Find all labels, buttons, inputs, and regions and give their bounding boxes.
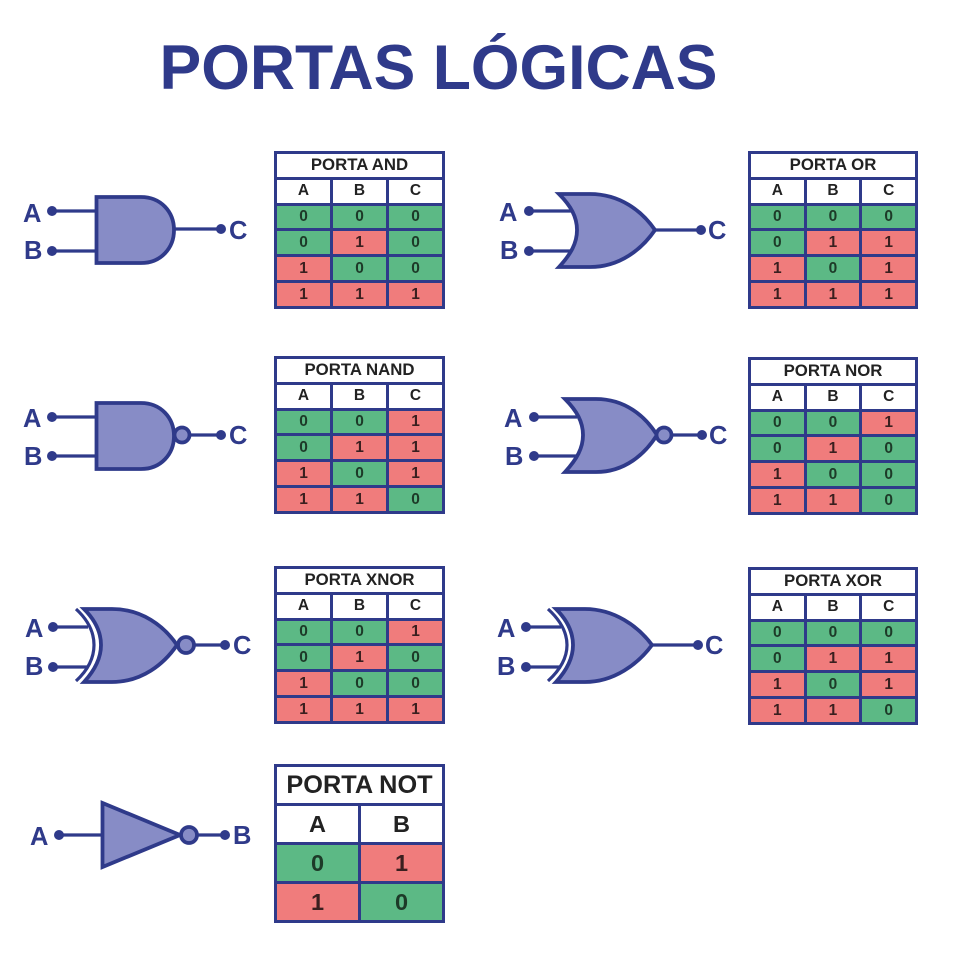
row 1 0 1: 1: [773, 260, 782, 277]
icon: AND gate: A: [23, 200, 41, 228]
icon: XNOR gate: C: [233, 632, 251, 660]
table heading: PORTA OR: [790, 155, 876, 174]
row 1 1 0: [277, 488, 442, 511]
row 1 1 1: [277, 283, 442, 306]
header row: C: [410, 387, 421, 404]
icon: NAND gate: B: [24, 443, 42, 471]
table heading: PORTA NOR: [784, 361, 882, 380]
row 1 1 0: 0: [884, 492, 893, 509]
row 0 0 0: 0: [773, 624, 782, 641]
table heading: PORTA NAND: [304, 360, 414, 379]
row 0 0 1: 0: [773, 414, 782, 431]
row 0 0 0: 0: [411, 208, 420, 225]
row 0 1: 1: [395, 850, 408, 876]
row 0 0 0: [751, 622, 915, 644]
row 1 0 1: 1: [411, 465, 420, 482]
row 0 1 1: [277, 436, 442, 459]
header row: A: [309, 810, 326, 836]
row 0 1 0: 1: [829, 440, 837, 457]
row 1 0 0: 1: [299, 675, 308, 692]
row 1 0 0: 1: [773, 466, 782, 483]
header row: [277, 806, 442, 842]
row 0 1 1: [751, 647, 915, 670]
row 1 0 0: 0: [411, 260, 420, 277]
row 0 0 1: 0: [299, 623, 308, 640]
row 1 1 1: 1: [884, 286, 893, 303]
icon: NOR gate: [504, 399, 727, 472]
header row: C: [410, 182, 421, 199]
row 1 0 0: [277, 257, 442, 280]
panel: NAND truth table: [274, 356, 445, 514]
row 0 0 0: [277, 206, 442, 228]
header row: [277, 385, 442, 408]
table heading: PORTA AND: [311, 155, 408, 174]
icon: OR gate: B: [500, 237, 518, 265]
icon: NOT gate: B: [233, 822, 251, 850]
row 0 0 1: 0: [355, 623, 364, 640]
row 1 0 1: 1: [884, 676, 893, 693]
row 0 1 1: 0: [773, 234, 782, 251]
row 1 0 1: [751, 673, 915, 696]
icon: NOR gate: C: [709, 422, 727, 450]
panel: OR truth table: [748, 151, 918, 309]
row 0 1 1: 1: [355, 439, 364, 456]
header row: A: [298, 387, 309, 404]
row 1 0 0: 0: [884, 466, 893, 483]
header row: A: [298, 182, 309, 199]
row 0 0 0: 0: [773, 208, 782, 225]
header row: B: [827, 598, 839, 615]
panel: NOT truth table: [274, 764, 445, 923]
row 0 1 0: [277, 646, 442, 669]
row 1 1 0: 1: [355, 491, 364, 508]
row 1 0 1: 0: [829, 260, 837, 277]
row 0 0 1: 1: [411, 623, 420, 640]
header row: C: [883, 598, 894, 615]
header row: [751, 596, 915, 619]
row 0 0 0: 0: [355, 208, 364, 225]
row 1 1 0: 1: [299, 491, 308, 508]
icon: OR gate: A: [499, 199, 517, 227]
row 1 1 1: [277, 698, 442, 721]
panel: AND truth table: [274, 151, 445, 309]
header row: B: [827, 388, 839, 405]
row 0 1 1: 1: [829, 650, 837, 667]
table heading: PORTA XNOR: [304, 570, 414, 589]
row 0 1 0: 0: [884, 440, 893, 457]
icon: OR gate: C: [708, 217, 726, 245]
table heading: [277, 359, 442, 382]
row 1 1 1: [751, 283, 915, 306]
row 0 1 0: 0: [773, 440, 782, 457]
row 1 0 0: 0: [355, 260, 364, 277]
row 0 0 0: 0: [829, 624, 837, 641]
row 0 0 0: 0: [299, 208, 308, 225]
panel: NOR truth table: [748, 357, 918, 515]
row 1 0 1: 0: [829, 676, 837, 693]
icon: AND gate: B: [24, 237, 42, 265]
table heading: [277, 569, 442, 592]
row 0 0 1: 1: [884, 414, 893, 431]
icon: AND gate: [23, 197, 247, 265]
row 1 1 0: 1: [829, 492, 837, 509]
header row: C: [883, 182, 894, 199]
row 1 1 0: [751, 699, 915, 722]
row 0 0 1: 0: [829, 414, 837, 431]
icon: XOR gate: A: [497, 615, 515, 643]
table heading: PORTA XOR: [784, 571, 882, 590]
row 1 0 1: [751, 257, 915, 280]
row 0 1 1: [751, 231, 915, 254]
row 1 1 1: 1: [355, 701, 364, 718]
row 1 1 1: 1: [299, 286, 308, 303]
row 1 1 1: 1: [411, 701, 420, 718]
header row: B: [354, 597, 365, 614]
row 1 1 0: 0: [411, 491, 420, 508]
row 1 1 0: 1: [773, 492, 782, 509]
row 0 0 1: [751, 412, 915, 434]
row 1 0: [277, 884, 442, 920]
row 1 1 1: 1: [355, 286, 364, 303]
icon: XOR gate: B: [497, 653, 515, 681]
row 1 0 1: 1: [299, 465, 308, 482]
header row: A: [772, 598, 783, 615]
title: PORTAS LÓGICAS: [160, 33, 718, 103]
row 1 1 0: 1: [829, 702, 837, 719]
panel: XNOR truth table: [274, 566, 445, 724]
row 0 1 0: 0: [411, 234, 420, 251]
row 1 0 1: 1: [884, 260, 893, 277]
row 0 1 0: 1: [355, 649, 364, 666]
table heading: PORTA NOT: [286, 770, 433, 798]
row 1 1 0: 0: [884, 702, 893, 719]
row 1 0 0: [751, 463, 915, 486]
icon: XOR gate: C: [705, 632, 723, 660]
icon: AND gate: C: [229, 217, 247, 245]
row 0 1 1: 1: [884, 650, 893, 667]
row 1 0 0: [277, 672, 442, 695]
row 0 1 0: [751, 437, 915, 460]
row 1 0 1: 0: [355, 465, 364, 482]
icon: NOT gate: [30, 803, 251, 867]
header row: C: [883, 388, 894, 405]
row 1 0 0: 0: [411, 675, 420, 692]
table heading: [277, 154, 442, 177]
row 1 0 1: [277, 462, 442, 485]
row 1 0: 0: [395, 888, 408, 914]
row 0 1 1: 1: [884, 234, 893, 251]
row 0 0 1: [277, 621, 442, 643]
row 0 0 0: 0: [829, 208, 837, 225]
row 0 1 0: 0: [299, 234, 308, 251]
row 0 1 0: 0: [299, 649, 308, 666]
icon: XOR gate: [497, 609, 723, 682]
header row: A: [298, 597, 309, 614]
icon: NAND gate: A: [23, 405, 41, 433]
row 0 0 0: 0: [884, 208, 893, 225]
row 0 0 1: 0: [299, 413, 308, 430]
row 0 0 1: 1: [411, 413, 420, 430]
table heading: [751, 360, 915, 383]
row 1 0 0: 1: [299, 260, 308, 277]
table heading: [751, 570, 915, 593]
row 0 1 1: 1: [829, 234, 837, 251]
row 0 1 0: 0: [411, 649, 420, 666]
row 1 0 1: 1: [773, 676, 782, 693]
row 1 1 1: 1: [773, 286, 782, 303]
header row: B: [827, 182, 839, 199]
row 0 0 1: [277, 411, 442, 433]
row 1 1 1: 1: [299, 701, 308, 718]
header row: B: [354, 387, 365, 404]
row 0 1: [277, 845, 442, 881]
row 1 1 1: 1: [829, 286, 837, 303]
row 0 1 1: 1: [411, 439, 420, 456]
icon: OR gate: [499, 194, 726, 267]
row 0 1 1: 0: [773, 650, 782, 667]
icon: NAND gate: C: [229, 422, 247, 450]
header row: [751, 386, 915, 409]
row 0 1 0: 1: [355, 234, 364, 251]
icon: NOR gate: A: [504, 405, 522, 433]
row 0 1 0: [277, 231, 442, 254]
header row: B: [354, 182, 365, 199]
table heading: [751, 154, 915, 177]
header row: A: [772, 182, 783, 199]
row 0 0 0: 0: [884, 624, 893, 641]
header row: [277, 595, 442, 618]
row 0 0 0: [751, 206, 915, 228]
row 0 1 1: 0: [299, 439, 308, 456]
icon: NAND gate: [23, 403, 247, 471]
row 1 1 0: 1: [773, 702, 782, 719]
table heading: [277, 767, 442, 803]
header row: A: [772, 388, 783, 405]
icon: NOT gate: A: [30, 823, 48, 851]
header row: C: [410, 597, 421, 614]
row 0 1: 0: [311, 850, 324, 876]
row 1 0 0: 0: [355, 675, 364, 692]
row 1 1 1: 1: [411, 286, 420, 303]
row 1 0 0: 0: [829, 466, 837, 483]
panel: XOR truth table: [748, 567, 918, 725]
header row: B: [393, 810, 410, 836]
icon: XNOR gate: [25, 609, 251, 682]
header row: [277, 180, 442, 203]
icon: XNOR gate: B: [25, 653, 43, 681]
icon: NOR gate: B: [505, 443, 523, 471]
icon: XNOR gate: A: [25, 615, 43, 643]
row 1 0: 1: [311, 888, 324, 914]
row 0 0 1: 0: [355, 413, 364, 430]
header row: [751, 180, 915, 203]
row 1 1 0: [751, 489, 915, 512]
